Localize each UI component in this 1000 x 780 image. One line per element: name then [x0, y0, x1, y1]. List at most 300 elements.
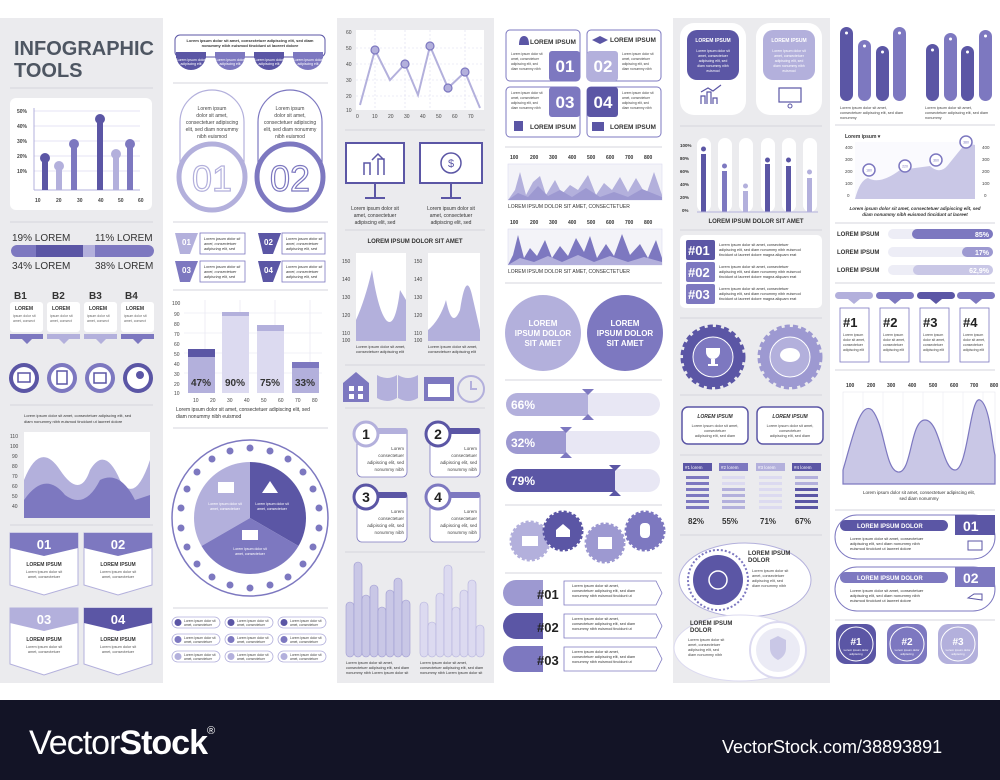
- col4: numbered grid 01-04: amet, consectetuer: [622, 57, 651, 61]
- col4: numbered grid 01-04: amet, consectetuer: [511, 96, 540, 100]
- B1-B4 boxes: B3: [89, 291, 102, 302]
- big circles: IPSUM DOLOR: [515, 329, 571, 338]
- col6: wave chart: 300: [887, 383, 896, 389]
- col5: capsule bar chart: 100%: [680, 143, 692, 148]
- col5: #01-#03 list: adipiscing elit, sed diam nonummy nibh euismod: [719, 248, 801, 252]
- bar chart with percentages: 70: [295, 398, 301, 404]
- area chart col1: Lorem ipsum dolor sit amet, consectetuer adipiscing elit, sed: [24, 413, 131, 418]
- col6: #1-#4 cards: adipiscing elit: [843, 348, 864, 352]
- col5: two text cards: Lorem ipsum dolor sit amet,: [767, 424, 813, 428]
- col6: wave chart: 600: [950, 383, 959, 389]
- col4 area charts: 300: [549, 220, 558, 226]
- col5: two icon cards: diam nonummy nibh: [697, 64, 729, 68]
- twin area charts: 140: [342, 277, 351, 283]
- col6: #1-#4 cards: Lorem ipsum: [963, 333, 983, 337]
- col6: area chart with pins: 360: [933, 158, 939, 162]
- shield cards 01-04: amet, consectetuer: [102, 650, 135, 654]
- col6: area chart with pins: 300: [845, 157, 853, 162]
- col3: line chart: 0: [356, 114, 359, 120]
- big circles: SIT AMET: [606, 339, 644, 348]
- circular pie diagram: amet, consectetuer: [210, 507, 241, 511]
- big circles: IPSUM DOLOR: [597, 329, 653, 338]
- area chart col1: 70: [12, 474, 18, 480]
- col6: progress rows: LOREM IPSUM: [837, 268, 879, 274]
- boards with icons: Lorem ipsum dolor sit: [351, 206, 400, 212]
- B1-B4 boxes: amet, consect: [124, 319, 146, 323]
- rounded bar charts col3: [346, 562, 484, 675]
- chevron rows 01-04: 04: [264, 266, 273, 275]
- col6: #1-#3 badges: Lorem ipsum dolor: [946, 648, 970, 652]
- col2: top timeline box: Lorem ipsum dolor: [216, 58, 245, 62]
- twin area charts: 120: [414, 313, 423, 319]
- arch cards 01 02: 01: [192, 158, 232, 199]
- col6: #1-#4 cards: #3: [923, 315, 937, 330]
- col5: equalizer bars: #3 lorem: [758, 465, 776, 470]
- shield cards 01-04: LOREM IPSUM: [100, 637, 136, 643]
- col4 area charts: 500: [587, 155, 596, 161]
- lollipop bar chart: 50%: [17, 109, 28, 115]
- col6: progress rows: 62,9%: [969, 268, 990, 275]
- numbered cards 1-4: Lorem: [391, 446, 404, 451]
- shield cards 01-04: LOREM IPSUM: [100, 562, 136, 568]
- pill list grid: amet, consectetuer: [237, 657, 266, 661]
- chevron rows 01-04: amet, consectetuer: [204, 242, 237, 246]
- twin area charts: consectetuer adipiscing elit: [356, 349, 405, 354]
- lollipop bar chart: [10, 98, 152, 210]
- col5: two text cards: LOREM IPSUM: [697, 414, 733, 420]
- col5: two icon cards: euismod: [706, 69, 720, 73]
- col6: area chart with pins: diam nonummy nibh euismod tincidunt ut laoreet: [862, 212, 968, 217]
- col4: numbered grid 01-04: 01: [556, 57, 574, 76]
- col6: #1-#3 badges: [836, 624, 978, 664]
- B1-B4 boxes: B1: [14, 291, 27, 302]
- twin area charts: 150: [342, 259, 351, 265]
- twin area charts: LOREM IPSUM DOLOR SIT AMET: [367, 239, 463, 245]
- arch cards 01 02: consectetuer adipiscing: [264, 120, 316, 126]
- col4 area charts: 700: [625, 220, 634, 226]
- col6: banner rows 01 02: [835, 515, 995, 611]
- pill list grid: amet, consectetuer: [184, 640, 213, 644]
- col6: progress rows: LOREM IPSUM: [837, 232, 879, 238]
- chevron rows 01-04: adipiscing elit, sed: [204, 275, 236, 279]
- col6: #1-#3 badges: adipiscing: [849, 652, 863, 656]
- col6: capsule columns: Lorem ipsum dolor sit amet,: [840, 106, 887, 110]
- footer banner: VectorStock.com/38893891: [722, 737, 942, 757]
- list rows #01-#03: #02: [537, 620, 559, 635]
- col2: top timeline box: nonummy nibh euismod tincidunt ut laoreet dolore: [202, 43, 299, 48]
- col6: progress rows: LOREM IPSUM: [837, 250, 879, 256]
- bar chart with percentages: 20: [174, 382, 180, 388]
- progress bars: 79%: [511, 474, 535, 488]
- col6: area chart with pins: 200: [845, 169, 853, 174]
- arch cards 01 02: elit, sed diam nonummy: [186, 127, 239, 133]
- percent bar: 38% LOREM: [95, 261, 153, 272]
- col4: numbered grid 01-04: Lorem ipsum dolor sit: [511, 52, 543, 56]
- col4: numbered grid 01-04: adipiscing elit, sed: [511, 62, 538, 66]
- B1-B4 boxes: [10, 291, 154, 344]
- lollipop bar chart: 60: [138, 198, 144, 204]
- lollipop bar chart: 40: [98, 198, 104, 204]
- bar chart with percentages: 10: [193, 398, 199, 404]
- col6: wave chart: 500: [929, 383, 938, 389]
- pill list grid: Lorem ipsum dolor sit: [184, 619, 216, 623]
- bar chart with percentages: 10: [174, 391, 180, 397]
- col6: wave chart: 700: [970, 383, 979, 389]
- col5: two icon cards: adipiscing elit, sed: [775, 59, 803, 63]
- area chart col1: 110: [10, 434, 18, 440]
- col2: top timeline box: Lorem ipsum dolor: [294, 58, 323, 62]
- twin area charts: 120: [342, 313, 351, 319]
- col5: equalizer bars: #1 lorem: [685, 465, 703, 470]
- col4: numbered grid 01-04: adipiscing elit, sed: [622, 62, 649, 66]
- shield cards 01-04: amet, consectetuer: [28, 575, 61, 579]
- col3: line chart: 50: [346, 46, 352, 52]
- numbered cards 1-4: nonummy nibh: [447, 530, 477, 535]
- numbered cards 1-4: 1: [362, 426, 370, 442]
- col2: top timeline box: Lorem ipsum dolor: [177, 58, 206, 62]
- col6: progress rows: 85%: [975, 232, 990, 239]
- col5: capsule bar chart: LOREM IPSUM DOLOR SIT AMET: [708, 219, 804, 225]
- circular pie diagram: Lorem ipsum dolor sit: [255, 502, 289, 506]
- twin area charts: 100: [342, 338, 351, 344]
- progress bars: 66%: [511, 398, 535, 412]
- boards with icons: adipiscing elit, sed: [431, 220, 472, 226]
- icon row: [343, 372, 484, 402]
- col5: circle info blocks: adipiscing elit, sed: [752, 579, 783, 583]
- arch cards 01 02: elit, sed diam nonummy: [264, 127, 317, 133]
- col5: two icon cards: Lorem ipsum dolor sit: [696, 49, 730, 53]
- col4: numbered grid 01-04: adipiscing elit, sed: [622, 101, 649, 105]
- col6: #1-#4 cards: adipiscing elit: [883, 348, 904, 352]
- chevron rows 01-04: amet, consectetuer: [286, 270, 319, 274]
- pill list grid: amet, consectetuer: [237, 623, 266, 627]
- numbered cards 1-4: 4: [434, 489, 442, 505]
- col3: line chart: 50: [436, 114, 442, 120]
- col5: #01-#03 list: [680, 235, 822, 308]
- col3: line chart: 70: [468, 114, 474, 120]
- pill list grid: [172, 617, 326, 662]
- col2: top timeline box: [175, 35, 325, 70]
- col3: line chart: 20: [388, 114, 394, 120]
- col5: #01-#03 list: Lorem ipsum dolor sit amet, consectetuer: [719, 287, 789, 291]
- list rows #01-#03: nonummy nibh euismod tincidunt ut: [572, 627, 633, 631]
- arch cards 01 02: Lorem ipsum: [276, 106, 304, 112]
- col6: area chart with pins: 0: [984, 193, 987, 198]
- col6: area chart with pins: 100: [982, 181, 990, 186]
- B1-B4 boxes: ipsum dolor sit: [87, 314, 110, 318]
- col5: capsule bar chart: [680, 138, 818, 225]
- boards with icons: amet, consectetuer: [354, 213, 397, 219]
- chevron rows 01-04: adipiscing elit, sed: [286, 247, 318, 251]
- rounded bar charts col3: Lorem ipsum dolor sit amet,: [420, 661, 467, 665]
- col6: wave chart: 400: [908, 383, 917, 389]
- shield cards 01-04: [10, 533, 152, 675]
- col3: line chart: 20: [346, 94, 352, 100]
- col6: capsule columns: [840, 27, 992, 120]
- arch cards 01 02: nibh euismod: [197, 134, 227, 140]
- chevron rows 01-04: Lorem ipsum dolor sit: [286, 265, 323, 269]
- shield cards 01-04: 03: [37, 612, 51, 627]
- B1-B4 boxes: B2: [52, 291, 65, 302]
- col6: banner rows 01 02: adipiscing elit, sed diam nonummy nibh: [850, 541, 920, 546]
- percent bar: 19% LOREM: [12, 233, 70, 244]
- col6: progress rows: 17%: [975, 250, 990, 257]
- bar chart with percentages: 20: [210, 398, 216, 404]
- chevron rows 01-04: [175, 233, 325, 282]
- col4: numbered grid 01-04: diam nonummy nibh: [511, 106, 541, 110]
- progress bars: [506, 389, 660, 496]
- col6: banner rows 01 02: Lorem ipsum dolor sit amet, consectetuer: [850, 588, 924, 593]
- column backgrounds: [0, 18, 830, 683]
- col6: #1-#3 badges: #1: [850, 637, 862, 648]
- twin area charts: 140: [414, 277, 423, 283]
- col5: equalizer bars: 82%: [688, 517, 704, 526]
- col5: #01-#03 list: adipiscing elit, sed diam nonummy nibh euismod: [719, 292, 801, 296]
- bar chart with percentages: 30: [227, 398, 233, 404]
- col5: two icon cards: [680, 23, 822, 115]
- col4: numbered grid 01-04: Lorem ipsum dolor sit: [622, 52, 654, 56]
- col6: banner rows 01 02: LOREM IPSUM DOLOR: [857, 524, 923, 530]
- bar chart with percentages: 70: [174, 332, 180, 338]
- col3: line chart: 30: [404, 114, 410, 120]
- numbered cards 1-4: Lorem: [464, 509, 477, 514]
- col5: wavy badges: [683, 327, 820, 387]
- boards with icons: Lorem ipsum dolor sit: [427, 206, 476, 212]
- col6: #1-#3 badges: adipiscing: [951, 652, 965, 656]
- numbered cards 1-4: adipiscing elit, sed: [367, 523, 404, 528]
- col6: area chart with pins: Lorem ipsum ▾: [845, 134, 881, 140]
- col5: circle info blocks: diam nonummy nibh: [752, 584, 786, 588]
- numbered cards 1-4: Lorem: [391, 509, 404, 514]
- arch cards 01 02: dolor sit amet,: [274, 113, 306, 119]
- col6: wave chart: Lorem ipsum dolor sit amet, consectetuer adipiscing elit,: [863, 490, 975, 495]
- pill list grid: Lorem ipsum dolor sit: [290, 619, 322, 623]
- B1-B4 boxes: LOREM: [52, 306, 70, 312]
- shield cards 01-04: 01: [37, 537, 51, 552]
- big circles: LOREM: [611, 319, 640, 328]
- B1-B4 boxes: amet, consect: [50, 319, 72, 323]
- numbered cards 1-4: 3: [362, 489, 370, 505]
- numbered cards 1-4: consectetuer: [451, 516, 478, 521]
- rounded bar charts col3: nonummy nibh Lorem ipsum dolor sit: [420, 671, 483, 675]
- rounded bar charts col3: consectetuer adipiscing elit, sed diam: [346, 666, 409, 670]
- col6: #1-#4 cards: #1: [843, 315, 857, 330]
- col4: numbered grid 01-04: diam nonummy nibh: [511, 67, 541, 71]
- percent bar: 34% LOREM: [12, 261, 70, 272]
- B1-B4 boxes: LOREM: [89, 306, 107, 312]
- col6: wave chart: 800: [990, 383, 999, 389]
- col6: area chart with pins: 400: [845, 145, 853, 150]
- pill list grid: Lorem ipsum dolor sit: [237, 619, 269, 623]
- col6: #1-#4 cards: Lorem ipsum: [883, 333, 903, 337]
- boards with icons: $: [448, 158, 454, 170]
- col5: #01-#03 list: Lorem ipsum dolor sit amet, consectetuer: [719, 243, 789, 247]
- col3: line chart: 10: [346, 108, 352, 114]
- col5: two text cards: adipiscing elit, sed diam: [695, 434, 735, 438]
- col5: two text cards: consectetuer: [704, 429, 727, 433]
- progress bars: 32%: [511, 436, 535, 450]
- twin area charts: 110: [414, 331, 422, 337]
- col4 area charts: 200: [530, 155, 539, 161]
- col6: banner rows 01 02: 01: [963, 518, 979, 534]
- shield cards 01-04: Lorem ipsum dolor sit: [26, 570, 63, 574]
- col4 area charts: 400: [568, 155, 577, 161]
- col6: #1-#4 cards: consectetuer: [963, 343, 984, 347]
- col5: equalizer bars: 55%: [722, 517, 738, 526]
- circular pie diagram: Lorem ipsum dolor sit: [233, 547, 267, 551]
- col5: two text cards: adipiscing elit, sed diam: [770, 434, 810, 438]
- col5: equalizer bars: 67%: [795, 517, 811, 526]
- col6: wave chart: 100: [846, 383, 855, 389]
- col4: numbered grid 01-04: LOREM IPSUM: [610, 124, 656, 131]
- bar chart with percentages: 100: [172, 301, 181, 307]
- numbered cards 1-4: [354, 422, 480, 542]
- col4 area charts: 600: [606, 220, 615, 226]
- col4 area charts: 200: [530, 220, 539, 226]
- col6: area chart with pins: [845, 134, 990, 217]
- twin area charts: 130: [342, 295, 351, 301]
- col3: line chart: 30: [346, 78, 352, 84]
- numbered cards 1-4: consectetuer: [378, 453, 405, 458]
- col4: numbered grid 01-04: Lorem ipsum dolor sit: [622, 91, 654, 95]
- rounded bar charts col3: Lorem ipsum dolor sit amet,: [346, 661, 393, 665]
- percent bar: 11% LOREM: [95, 233, 153, 244]
- pill list grid: Lorem ipsum dolor sit: [184, 636, 216, 640]
- col5: two icon cards: amet, consectetuer: [698, 54, 729, 58]
- col5: two icon cards: adipiscing elit, sed: [699, 59, 727, 63]
- lollipop bar chart: 50: [118, 198, 124, 204]
- chevron rows 01-04: Lorem ipsum dolor sit: [204, 265, 241, 269]
- col2: top timeline box: adipiscing elit: [180, 62, 202, 66]
- col6: #1-#4 cards: adipiscing elit: [963, 348, 984, 352]
- col4: numbered grid 01-04: 04: [594, 93, 613, 112]
- col4: numbered grid 01-04: LOREM IPSUM: [610, 37, 656, 44]
- arch cards 01 02: Lorem ipsum: [198, 106, 226, 112]
- col5: #01-#03 list: #03: [688, 287, 710, 302]
- area chart col1: 90: [12, 454, 18, 460]
- col6: banner rows 01 02: Lorem ipsum dolor sit amet, consectetuer: [850, 536, 924, 541]
- twin area charts: 150: [414, 259, 423, 265]
- col6: #1-#4 cards: [835, 292, 995, 362]
- col5: two icon cards: euismod: [782, 69, 796, 73]
- pill list grid: Lorem ipsum dolor sit: [237, 653, 269, 657]
- col5: two icon cards: LOREM IPSUM: [771, 38, 807, 44]
- pill list grid: amet, consectetuer: [237, 640, 266, 644]
- shield cards 01-04: LOREM IPSUM: [26, 637, 62, 643]
- bar chart with percentages: 75%: [260, 378, 280, 389]
- arch cards 01 02: consectetuer adipiscing: [186, 120, 238, 126]
- B1-B4 boxes: B4: [125, 291, 138, 302]
- col5: circle info blocks: LOREM IPSUM: [690, 621, 732, 627]
- bar chart with percentages: 40: [174, 362, 180, 368]
- col6: #1-#3 badges: #2: [901, 637, 913, 648]
- col6: area chart with pins: 180: [866, 168, 872, 172]
- big circles: SIT AMET: [524, 339, 562, 348]
- col6: area chart with pins: 100: [845, 181, 853, 186]
- list rows #01-#03: [503, 580, 662, 672]
- col3: line chart: 40: [346, 62, 352, 68]
- col6: #1-#4 cards: #4: [963, 315, 978, 330]
- col4 area charts: LOREM IPSUM DOLOR SIT AMET, CONSECTETUER: [508, 204, 630, 210]
- col5: #01-#03 list: #01: [688, 243, 710, 258]
- bar chart with percentages: 60: [278, 398, 284, 404]
- bar chart with percentages: 90%: [225, 378, 245, 389]
- list rows #01-#03: Lorem ipsum dolor sit amet,: [572, 617, 619, 621]
- B1-B4 boxes: ipsum dolor sit: [124, 314, 147, 318]
- col6: #1-#4 cards: dolor sit amet,: [923, 338, 945, 342]
- list rows #01-#03: consectetuer adipiscing elit, sed diam: [572, 589, 635, 593]
- twin area charts: Lorem ipsum dolor sit amet,: [428, 344, 477, 349]
- pill list grid: Lorem ipsum dolor sit: [290, 653, 322, 657]
- col5: circle info blocks: LOREM IPSUM: [748, 551, 790, 557]
- bar chart with percentages: 80: [174, 322, 180, 328]
- boards with icons: amet, consectetuer: [430, 213, 473, 219]
- shield cards 01-04: Lorem ipsum dolor sit: [100, 570, 137, 574]
- col5: two text cards: [682, 407, 823, 444]
- list rows #01-#03: Lorem ipsum dolor sit amet,: [572, 584, 619, 588]
- col5: circle info blocks: DOLOR: [748, 558, 770, 564]
- col6: #1-#4 cards: adipiscing elit: [923, 348, 944, 352]
- col6: #1-#4 cards: dolor sit amet,: [843, 338, 865, 342]
- col4 area charts: [508, 155, 662, 275]
- col5: #01-#03 list: Lorem ipsum dolor sit amet, consectetuer: [719, 265, 789, 269]
- col4: numbered grid 01-04: Lorem ipsum dolor sit: [511, 91, 543, 95]
- col6: wave chart: [843, 383, 999, 501]
- col4 area charts: 800: [644, 220, 653, 226]
- col5: #01-#03 list: #02: [688, 265, 710, 280]
- numbered cards 1-4: consectetuer: [451, 453, 478, 458]
- numbered cards 1-4: nonummy nibh: [374, 530, 404, 535]
- chevron rows 01-04: 03: [182, 266, 191, 275]
- lollipop bar chart: 40%: [17, 124, 28, 130]
- col5: capsule bar chart: 40%: [680, 182, 689, 187]
- col4 area charts: 700: [625, 155, 634, 161]
- col5: circle info blocks: Lorem ipsum dolor sit: [688, 638, 725, 642]
- col5: two icon cards: LOREM IPSUM: [695, 38, 731, 44]
- circular pie diagram: [172, 440, 328, 596]
- bar chart with percentages: 47%: [191, 378, 211, 389]
- col5: two icon cards: Lorem ipsum dolor sit: [772, 49, 806, 53]
- col3: line chart: 40: [420, 114, 426, 120]
- pill list grid: Lorem ipsum dolor sit: [237, 636, 269, 640]
- list rows #01-#03: Lorem ipsum dolor sit amet,: [572, 650, 619, 654]
- circular pie diagram: Lorem ipsum dolor sit: [208, 502, 242, 506]
- col6: banner rows 01 02: adipiscing elit, sed diam nonummy nibh: [850, 593, 920, 598]
- big circles: [505, 295, 663, 371]
- title: INFOGRAPHIC: [14, 38, 154, 60]
- col3: line chart: 60: [346, 30, 352, 36]
- col5: equalizer bars: 71%: [760, 517, 776, 526]
- col6: area chart with pins: 300: [982, 157, 990, 162]
- lollipop bar chart: 30%: [17, 139, 28, 145]
- numbered cards 1-4: adipiscing elit, sed: [440, 523, 477, 528]
- numbered cards 1-4: nonummy nibh: [374, 467, 404, 472]
- twin area charts: 110: [342, 331, 350, 337]
- col5: circle info blocks: Lorem ipsum dolor sit: [752, 569, 789, 573]
- col5: two text cards: Lorem ipsum dolor sit amet,: [692, 424, 738, 428]
- numbered cards 1-4: adipiscing elit, sed: [367, 460, 404, 465]
- col4 area charts: LOREM IPSUM DOLOR SIT AMET, CONSECTETUER: [508, 269, 630, 275]
- col6: area chart with pins: 400: [982, 145, 990, 150]
- bar chart with percentages: 90: [174, 312, 180, 318]
- circular pie diagram: amet, consectetuer: [235, 552, 266, 556]
- area chart col1: 60: [12, 484, 18, 490]
- col2: top timeline box: adipiscing elit: [258, 62, 280, 66]
- col4 area charts: 300: [549, 155, 558, 161]
- col4: numbered grid 01-04: adipiscing elit, sed: [511, 101, 538, 105]
- col6: banner rows 01 02: 02: [963, 570, 979, 586]
- col2: top timeline box: Lorem ipsum dolor: [255, 58, 284, 62]
